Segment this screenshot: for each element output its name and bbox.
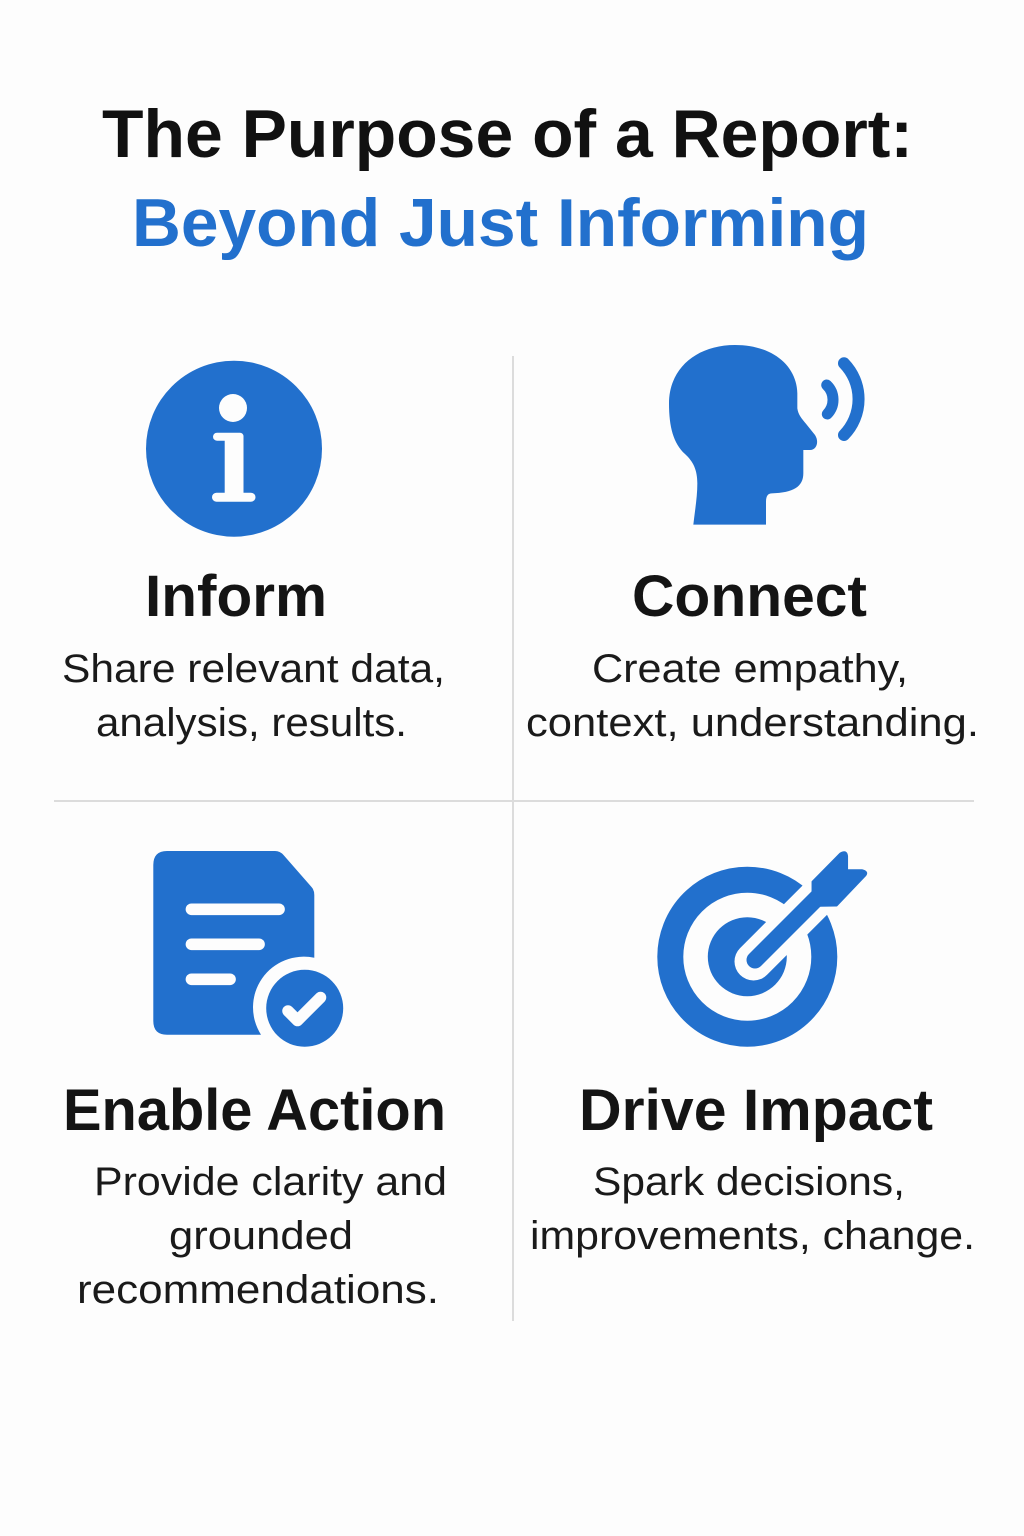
title: Beyond Just Informing [132,185,869,261]
text: enable action description: recommendations. [77,1268,439,1312]
text: enable action description: grounded [169,1214,353,1258]
text: drive impact description: improvements, change. [530,1214,975,1258]
icon: target with arrow [670,852,866,1034]
title [102,96,913,261]
heading: connect: Connect [632,564,867,629]
text: inform description: analysis, results. [96,701,407,745]
text: connect description: Create empathy, [592,647,908,691]
text: enable action description: Provide clarity and [94,1160,447,1204]
title: The Purpose of a Report: [102,96,913,172]
text: connect description [526,647,979,745]
icon: speaking head [669,345,859,525]
text: enable action description [77,1160,447,1312]
icon: information circle [146,361,322,537]
heading: enable action: Enable Action [63,1078,446,1143]
panel: drive impact [530,852,975,1258]
text: inform description: Share relevant data, [62,647,445,691]
icon: document with check badge [153,851,343,1047]
text: drive impact description: Spark decisions, [593,1160,905,1204]
panel: inform [62,361,445,745]
panel: connect [526,345,979,745]
heading: inform: Inform [145,564,327,629]
panel: enable action [63,851,447,1312]
text: connect description: context, understanding. [526,701,979,745]
text: drive impact description [530,1160,975,1258]
heading: drive impact: Drive Impact [579,1078,933,1143]
text: inform description [62,647,445,745]
